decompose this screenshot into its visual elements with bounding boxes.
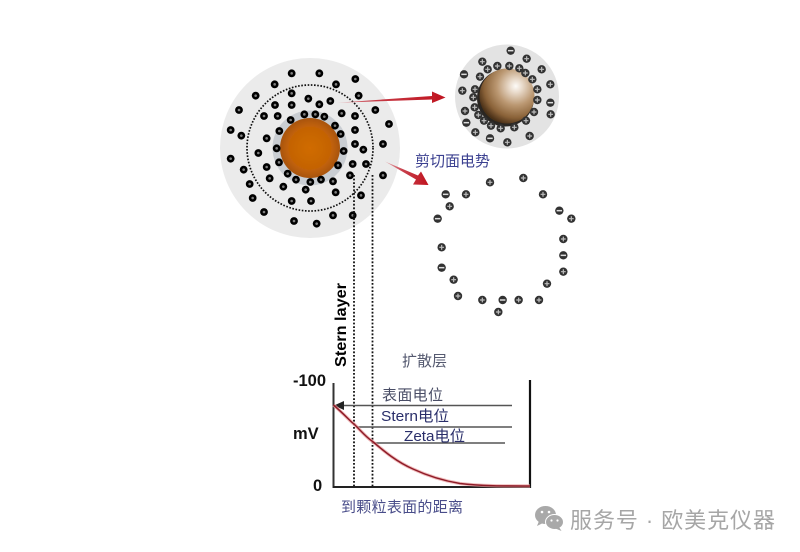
slipping plane dotted circle xyxy=(247,85,373,211)
potential level lines xyxy=(336,406,512,443)
label: mV: mV xyxy=(293,425,319,443)
label: stern potential: Stern电位 xyxy=(381,408,449,425)
label: diffuse layer: 扩散层 xyxy=(402,353,447,370)
label: zeta potential: Zeta电位 xyxy=(404,428,465,445)
slipping plane ion ring xyxy=(433,174,576,316)
label: slipping plane potential: 剪切面电势 xyxy=(415,153,490,170)
diffuse layer disc xyxy=(220,58,400,238)
ion cloud disc xyxy=(455,44,559,148)
sphere xyxy=(480,68,534,124)
stern layer halo xyxy=(272,110,348,186)
decay curve xyxy=(334,405,530,486)
arrow: to slipping plane ions xyxy=(385,162,428,185)
arrowhead at surface potential xyxy=(334,401,344,410)
counter ions xyxy=(227,69,393,228)
dotted guide lines xyxy=(354,175,372,488)
icon: wechat xyxy=(535,506,564,531)
ions xyxy=(458,46,555,147)
main particle diagram xyxy=(220,58,400,238)
potential chart xyxy=(293,372,531,516)
label: -100: -100 xyxy=(293,372,326,390)
sphere shadow xyxy=(477,70,534,126)
stern layer particle xyxy=(455,44,559,148)
label: distance to particle surface: 到颗粒表面的距离 xyxy=(341,499,463,516)
watermark xyxy=(535,506,775,533)
label: 0: 0 xyxy=(313,477,322,495)
axes xyxy=(333,380,531,488)
label: surface potential: 表面电位 xyxy=(382,387,443,404)
label: stern layer: Stern layer xyxy=(333,283,350,367)
particle core xyxy=(280,118,340,178)
watermark text: 服务号 · 欧美克仪器 xyxy=(570,508,775,533)
arrow: to stern layer particle xyxy=(337,92,446,103)
